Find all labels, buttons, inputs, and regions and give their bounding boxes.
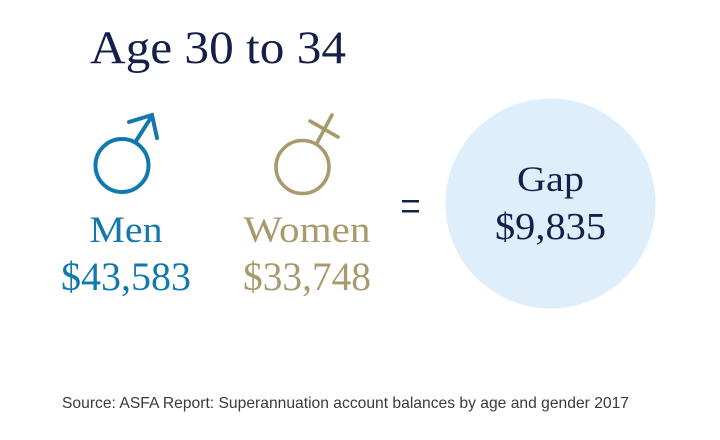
value: men: $43,583 — [61, 254, 191, 299]
icon: female symbol — [276, 115, 338, 194]
icon: male symbol — [96, 115, 157, 192]
label: men: Men — [90, 210, 162, 251]
gap label: Gap — [517, 159, 584, 199]
title: Age 30 to 34 — [90, 22, 346, 74]
equals sign — [402, 200, 419, 212]
gap value: $9,835 — [495, 206, 606, 248]
value: women: $33,748 — [243, 254, 371, 299]
gap circle — [446, 98, 656, 308]
label: women: Women — [244, 210, 370, 251]
source note: Source: ASFA Report: Superannuation account balances by age and gender 2017 — [62, 395, 629, 412]
